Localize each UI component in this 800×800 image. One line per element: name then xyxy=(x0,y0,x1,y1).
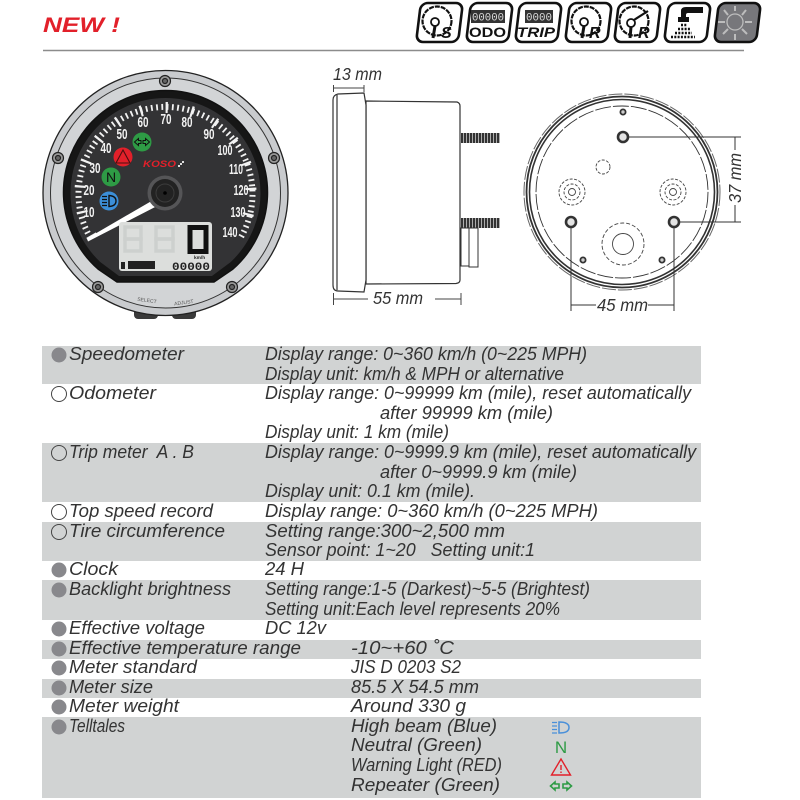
row: odometer: Odometer xyxy=(69,382,157,403)
row: backlight brightness xyxy=(52,578,590,619)
row: clock: 24 H xyxy=(264,558,305,579)
row: meter size: Meter size xyxy=(69,676,153,697)
dimension 55 mm xyxy=(334,288,461,308)
rear outer rings xyxy=(524,94,720,290)
row: clock xyxy=(52,558,305,579)
row: trip meter xyxy=(52,441,698,501)
row: meter weight: Meter weight xyxy=(69,695,180,716)
icon: odometer: ODO xyxy=(469,24,506,40)
icon: high beam blue xyxy=(552,722,569,733)
row: meter standard: JIS D 0203 S2 xyxy=(350,656,462,677)
LCD fuel bar xyxy=(121,261,155,269)
rear view drawing xyxy=(524,94,745,315)
row: telltales: Repeater (Green) xyxy=(351,774,500,795)
scale numbers: 100 xyxy=(218,143,232,159)
telltale: high beam xyxy=(100,192,118,210)
small holes xyxy=(580,109,665,263)
row: effective voltage: DC 12v xyxy=(265,617,328,638)
LCD speed digit xyxy=(190,228,206,252)
scale numbers: 110 xyxy=(229,162,243,178)
row: telltales: Telltales xyxy=(69,715,125,736)
icon: speedometer: S xyxy=(441,25,452,42)
icon: waterproof shower xyxy=(664,3,711,42)
telltale: neutral xyxy=(102,168,120,186)
row: effective temperature range: -10~+60 ˚C xyxy=(351,637,455,658)
icon: trip meter: 0000 xyxy=(526,12,552,24)
icon: trip meter xyxy=(515,3,562,42)
rear mounting bolts xyxy=(461,138,500,223)
row: odometer: after 99999 km (mile) xyxy=(380,402,553,423)
LCD display xyxy=(119,222,212,274)
icon: tire circumference xyxy=(614,3,661,42)
scale numbers: 90 xyxy=(204,127,214,143)
row: backlight brightness: Setting range:1-5 (Darkest)~5-5 (Brightest) xyxy=(265,578,590,599)
row: trip meter: Trip meter A . B xyxy=(69,441,194,462)
body xyxy=(366,101,460,284)
row: tire circumference: Tire circumference xyxy=(69,520,225,541)
bezel screws xyxy=(52,76,280,292)
row: meter size xyxy=(52,676,479,697)
row: trip meter: Display range: 0~9999.9 km (mile), reset automatically xyxy=(265,441,698,462)
icon: top speed record: R xyxy=(589,25,601,42)
KOSO logo: KOSO xyxy=(143,159,177,170)
dashed features xyxy=(559,160,686,265)
row: effective temperature range: Effective temperature range xyxy=(69,637,301,658)
scale numbers: 20 xyxy=(84,183,94,199)
row: odometer xyxy=(52,382,693,442)
row: meter weight xyxy=(52,695,467,716)
KOSO logo xyxy=(143,159,184,170)
dimension 37 mm xyxy=(628,137,745,222)
bezel profile xyxy=(333,93,366,292)
knobs xyxy=(134,308,196,319)
row: telltales xyxy=(52,715,572,795)
black dial face xyxy=(64,91,268,282)
row: meter size: 85.5 X 54.5 mm xyxy=(351,676,479,697)
row: telltales: High beam (Blue) xyxy=(351,715,497,736)
needle hub xyxy=(148,176,182,210)
row: speedometer: Speedometer xyxy=(69,343,185,364)
mounting holes xyxy=(566,132,679,227)
side view drawing xyxy=(333,64,500,308)
scale numbers: 40 xyxy=(100,141,112,157)
icon: tire circumference: R xyxy=(638,25,650,42)
bezel xyxy=(43,70,288,316)
heading: NEW!: NEW ! xyxy=(43,14,120,37)
row: meter weight: Around 330 g xyxy=(350,695,467,716)
icon: odometer: 00000 xyxy=(472,12,504,24)
row: tire circumference: Setting range:300~2,500 mm xyxy=(265,520,505,541)
row: odometer: Display range: 0~99999 km (mile), reset automatically xyxy=(265,382,693,403)
table row shading xyxy=(42,346,701,798)
row: odometer: Display unit: 1 km (mile) xyxy=(265,421,449,442)
scale numbers: 70 xyxy=(160,112,172,128)
button labels xyxy=(137,297,194,307)
row: trip meter: Display unit: 0.1 km (mile). xyxy=(265,480,475,501)
telltale: neutral: N xyxy=(106,169,116,185)
button labels: ADJUST xyxy=(174,299,194,307)
icon: speedometer xyxy=(416,3,463,42)
row: telltales: Neutral (Green) xyxy=(351,734,482,755)
dimension 13 mm: 13 mm xyxy=(333,64,382,84)
icon: warning red xyxy=(552,759,570,775)
row: trip meter: after 0~9999.9 km (mile) xyxy=(380,461,577,482)
dimension 37 mm: 37 mm xyxy=(725,153,745,203)
feature icons row xyxy=(416,3,761,42)
icon: top speed record xyxy=(565,3,612,42)
row: effective temperature range xyxy=(52,637,455,658)
specification table xyxy=(42,343,701,798)
scale numbers: 120 xyxy=(234,183,248,199)
telltale: warning xyxy=(114,148,132,166)
icon: repeater green xyxy=(550,782,572,790)
dimension 13 mm xyxy=(333,64,382,92)
row: tire circumference xyxy=(52,520,535,560)
scale numbers: 10 xyxy=(84,205,94,221)
icon: trip meter: TRIP xyxy=(517,24,556,40)
scale numbers: 60 xyxy=(138,115,148,131)
connector xyxy=(461,228,478,267)
row: effective voltage: Effective voltage xyxy=(69,617,205,638)
LCD ghost digits xyxy=(125,227,173,251)
LCD odometer: 00000 xyxy=(172,262,210,274)
LCD unit: km/h xyxy=(194,255,205,261)
dimension 45 mm: 45 mm xyxy=(597,295,648,315)
row: backlight brightness: Setting unit:Each level represents 20% xyxy=(265,598,560,619)
scale numbers: 130 xyxy=(230,205,246,221)
row: top speed record xyxy=(52,500,598,521)
row: meter standard: Meter standard xyxy=(69,656,198,677)
gauge front view xyxy=(43,70,288,319)
row: top speed record: Top speed record xyxy=(69,500,214,521)
scale numbers: 30 xyxy=(90,161,100,177)
button labels: SELECT xyxy=(137,297,157,305)
row: speedometer xyxy=(52,343,587,384)
row: clock: Clock xyxy=(69,558,120,579)
row: backlight brightness: Backlight brightness xyxy=(69,578,231,599)
row: telltales: Warning Light (RED) xyxy=(351,754,502,775)
row: speedometer: Display unit: km/h & MPH or alternative xyxy=(265,363,564,384)
scale numbers: 50 xyxy=(116,127,128,143)
scale numbers: 80 xyxy=(182,115,192,131)
scale numbers xyxy=(84,112,248,241)
scale ticks xyxy=(78,107,252,238)
icon: odometer xyxy=(466,3,513,42)
icon: backlight xyxy=(714,3,761,42)
row: tire circumference: Sensor point: 1~20 Setting unit:1 xyxy=(265,539,535,560)
row: effective voltage xyxy=(52,617,328,638)
needle xyxy=(87,199,159,242)
icon: neutral green: N xyxy=(555,738,567,757)
dimension 45 mm xyxy=(571,227,674,315)
row: top speed record: Display range: 0~360 km/h (0~225 MPH) xyxy=(265,500,598,521)
telltale: repeater xyxy=(132,132,152,152)
row: speedometer: Display range: 0~360 km/h (0~225 MPH) xyxy=(265,343,587,364)
scale numbers: 140 xyxy=(222,225,238,241)
dimension 55 mm: 55 mm xyxy=(373,288,423,308)
row: meter standard xyxy=(52,656,462,677)
